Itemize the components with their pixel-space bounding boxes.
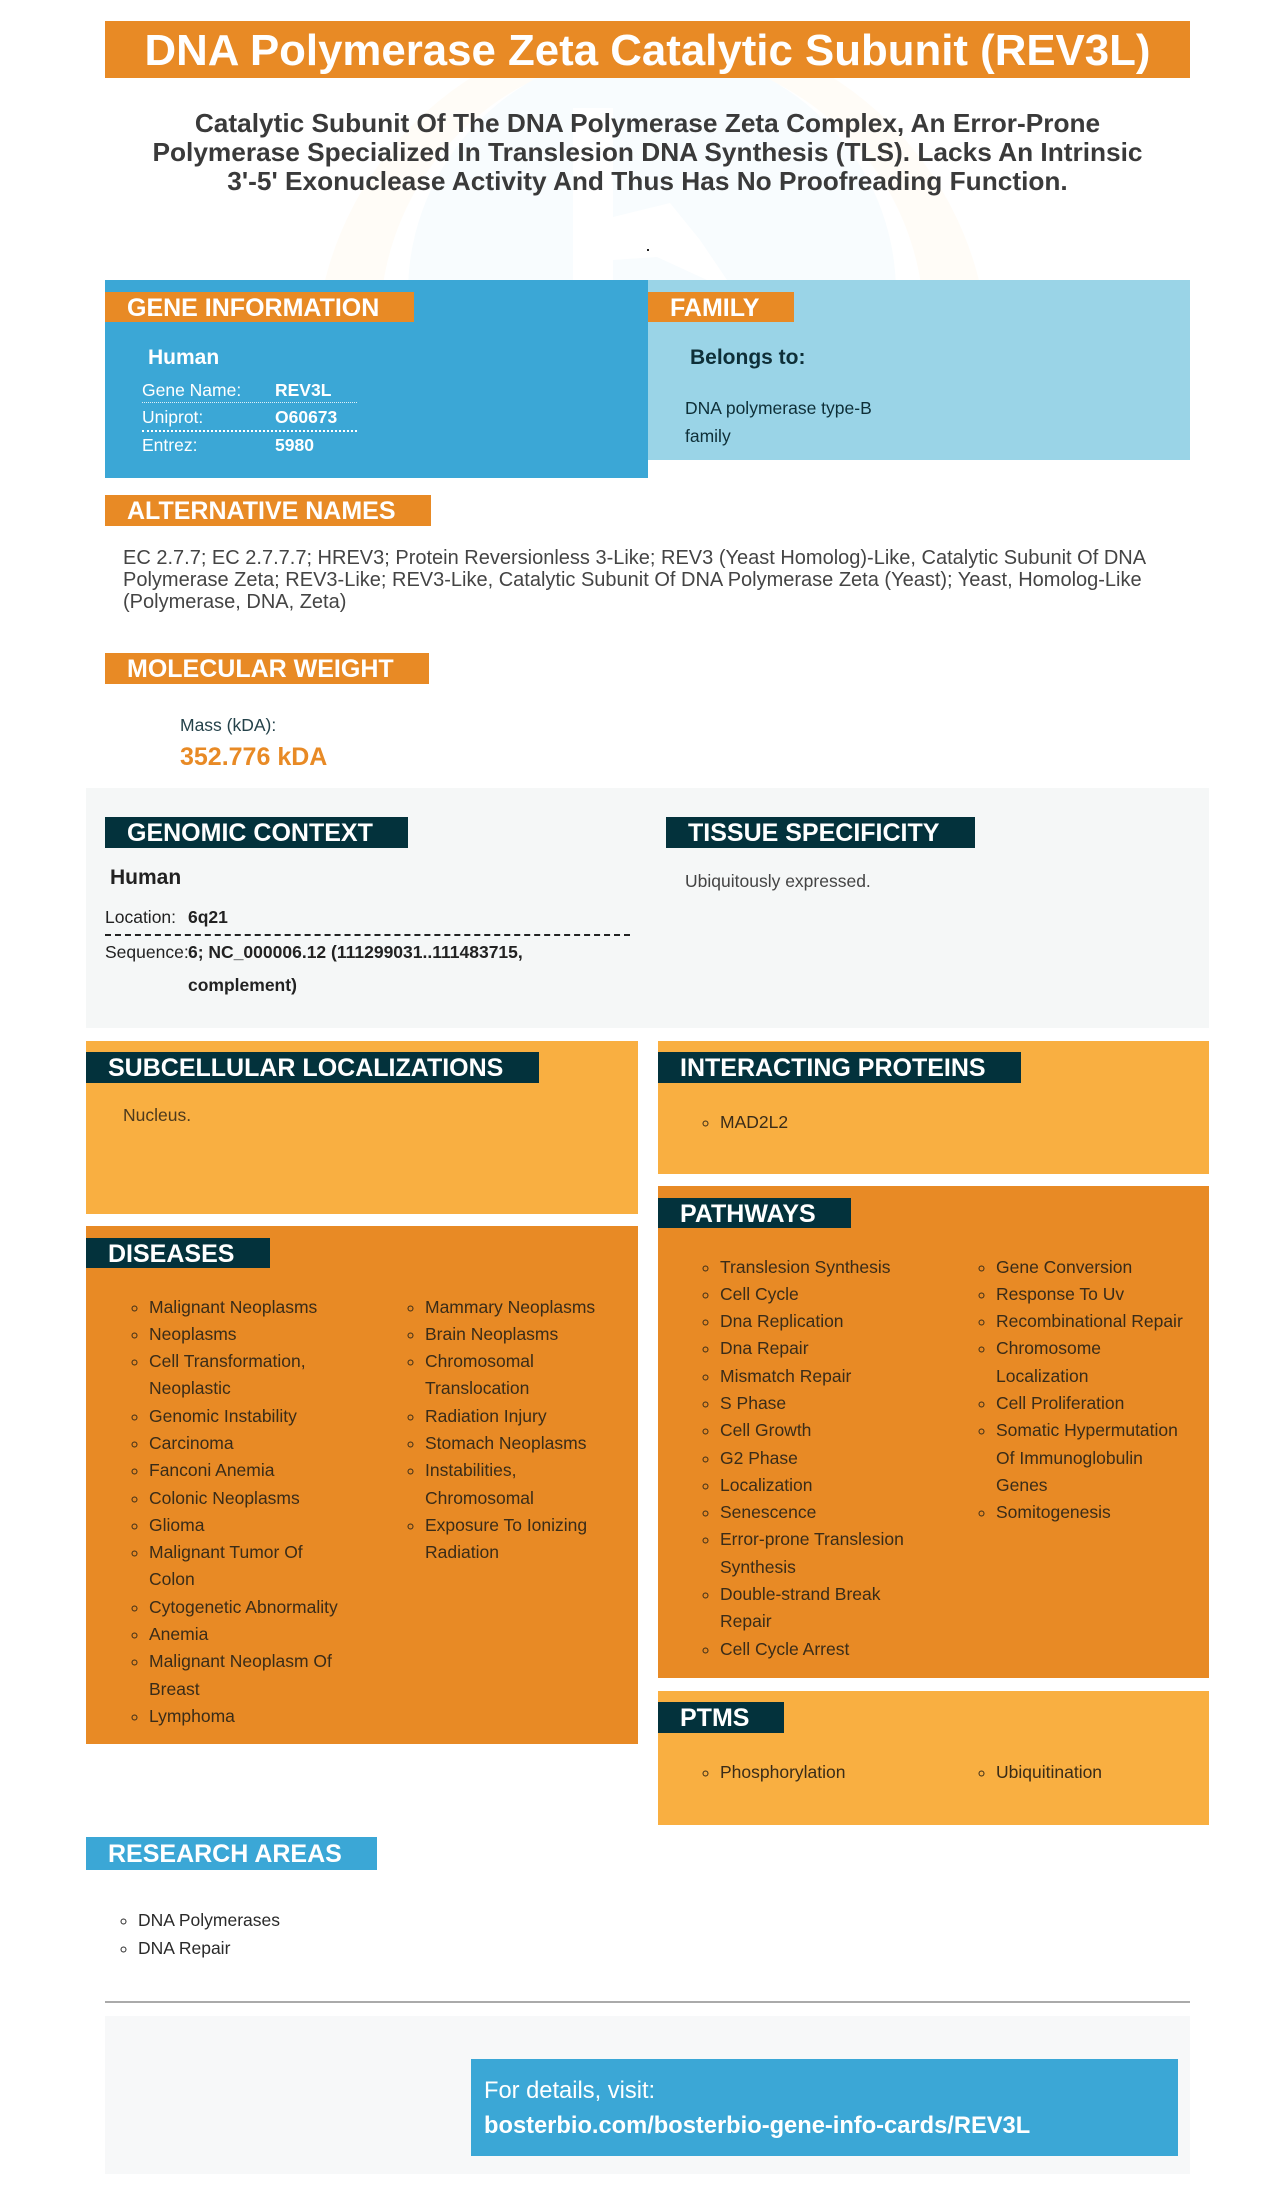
- pathway list column 2: Localization: [996, 1366, 1088, 1386]
- disease list column 1: Cell Transformation,: [149, 1351, 306, 1371]
- heading: pathways: PATHWAYS: [680, 1200, 816, 1228]
- subtitle description: 3'-5' Exonuclease Activity And Thus Has No Proofreading Function.: [227, 166, 1068, 196]
- subtitle description: Catalytic Subunit Of The DNA Polymerase Zeta Complex, An Error-Prone: [195, 108, 1100, 138]
- pathway list column 1: Senescence: [720, 1502, 816, 1522]
- localization text: Nucleus.: [123, 1105, 191, 1125]
- subtitle description: Polymerase Specialized In Translesion DNA Synthesis (TLS). Lacks An Intrinsic: [152, 136, 1143, 166]
- disease list column 1: Neoplasms: [149, 1324, 237, 1344]
- species label: Human: [148, 346, 219, 369]
- panel: genomic context and tissue specificity: [86, 788, 1209, 1028]
- panel: footer: [105, 2016, 1190, 2174]
- heading: family: [648, 292, 794, 322]
- gene detail table: [142, 380, 357, 455]
- disease list column 2: Chromosomal: [425, 1488, 534, 1508]
- disease list column 1: Carcinoma: [149, 1433, 234, 1453]
- panel: pathways: [658, 1186, 1209, 1678]
- panel: subcellular localizations: [86, 1041, 638, 1214]
- disease list column 2: Radiation Injury: [425, 1406, 547, 1426]
- panel: ptms: [658, 1691, 1209, 1825]
- panel: diseases: [86, 1226, 638, 1744]
- sequence value: 6; NC_000006.12 (111299031..111483715,: [188, 942, 523, 962]
- alternative names text: [123, 547, 1146, 613]
- gene detail table: 5980: [275, 435, 314, 455]
- research areas list: DNA Polymerases: [138, 1910, 280, 1930]
- pathway list column 2: Response To Uv: [996, 1284, 1124, 1304]
- subtitle description: [152, 108, 1143, 196]
- ptm list column 2: Ubiquitination: [996, 1762, 1102, 1782]
- pathway list column 2: Somitogenesis: [996, 1502, 1111, 1522]
- location row: Location:: [105, 907, 176, 927]
- heading: interacting proteins: INTERACTING PROTEINS: [680, 1054, 986, 1082]
- disease list column 1: Anemia: [149, 1624, 208, 1644]
- heading: gene information: GENE INFORMATION: [127, 294, 379, 322]
- disease list column 2: [408, 1296, 595, 1562]
- research areas list: [120, 1910, 280, 1958]
- sequence value: [188, 942, 523, 994]
- location value: 6q21: [188, 907, 228, 927]
- mass label: Mass (kDA):: [180, 715, 276, 735]
- pathway list column 1: Cell Cycle Arrest: [720, 1639, 849, 1659]
- heading: subcellular localizations: SUBCELLULAR LOCALIZATIONS: [108, 1054, 503, 1082]
- pathway list column 1: G2 Phase: [720, 1448, 798, 1468]
- pathway list column 2: Recombinational Repair: [996, 1311, 1183, 1331]
- heading: ptms: [658, 1702, 784, 1733]
- center dot: [647, 249, 649, 251]
- disease list column 2: Brain Neoplasms: [425, 1324, 558, 1344]
- gene detail table: REV3L: [275, 380, 331, 400]
- disease list column 2: Stomach Neoplasms: [425, 1433, 586, 1453]
- pathway list column 2: [978, 1256, 1183, 1522]
- disease list column 1: Malignant Neoplasms: [149, 1296, 317, 1316]
- disease list column 1: Cytogenetic Abnormality: [149, 1597, 338, 1617]
- disease list column 1: Colonic Neoplasms: [149, 1488, 300, 1508]
- panel: family: [648, 280, 1190, 460]
- belongs to label: Belongs to:: [690, 346, 806, 369]
- disease list column 2: Mammary Neoplasms: [425, 1296, 595, 1316]
- disease list column 1: Glioma: [149, 1515, 204, 1535]
- family text: [685, 398, 872, 446]
- disease list column 2: Exposure To Ionizing: [425, 1515, 587, 1535]
- heading: family: FAMILY: [670, 294, 759, 322]
- gene detail table: Gene Name:: [142, 380, 241, 400]
- dashed divider: [105, 934, 630, 936]
- disease list column 2: Radiation: [425, 1542, 499, 1562]
- species label: Human: [110, 866, 181, 889]
- heading: molecular weight: MOLECULAR WEIGHT: [127, 655, 394, 683]
- tissue specificity text: Ubiquitously expressed.: [685, 871, 871, 891]
- disease list column 1: Lymphoma: [149, 1706, 235, 1726]
- heading: alternative names: ALTERNATIVE NAMES: [127, 497, 396, 525]
- sequence value: complement): [188, 974, 297, 994]
- pathway list column 1: Localization: [720, 1475, 812, 1495]
- pathway list column 1: Translesion Synthesis: [720, 1256, 891, 1276]
- heading: tissue specificity: TISSUE SPECIFICITY: [688, 819, 939, 847]
- gene detail table: Uniprot:: [142, 407, 203, 427]
- pathway list column 1: Double-strand Break: [720, 1584, 880, 1604]
- heading: diseases: DISEASES: [108, 1240, 234, 1268]
- pathway list column 2: Somatic Hypermutation: [996, 1420, 1178, 1440]
- gene detail table: O60673: [275, 407, 337, 427]
- gene detail table: Entrez:: [142, 435, 197, 455]
- heading: research areas: RESEARCH AREAS: [108, 1840, 342, 1868]
- pathway list column 1: Synthesis: [720, 1557, 796, 1577]
- pathway list column 2: Genes: [996, 1475, 1048, 1495]
- disease list column 1: Colon: [149, 1569, 195, 1589]
- heading: ptms: PTMS: [680, 1704, 749, 1732]
- pathway list column 1: [702, 1256, 904, 1659]
- alternative names text: (Polymerase, DNA, Zeta): [123, 591, 346, 613]
- pathway list column 2: Gene Conversion: [996, 1256, 1132, 1276]
- footer divider: [105, 2001, 1190, 2003]
- pathway list column 1: Dna Repair: [720, 1338, 809, 1358]
- pathway list column 1: Mismatch Repair: [720, 1366, 851, 1386]
- research areas list: DNA Repair: [138, 1938, 230, 1958]
- pathway list column 2: Cell Proliferation: [996, 1393, 1124, 1413]
- disease list column 2: Translocation: [425, 1378, 529, 1398]
- pathway list column 1: Dna Replication: [720, 1311, 844, 1331]
- pathway list column 1: Cell Growth: [720, 1420, 811, 1440]
- callout: details link: [471, 2059, 1178, 2156]
- heading: genomic context: GENOMIC CONTEXT: [127, 819, 373, 847]
- pathway list column 2: Of Immunoglobulin: [996, 1448, 1143, 1468]
- panel: gene information: [105, 280, 648, 478]
- pathway list column 1: Repair: [720, 1611, 772, 1631]
- pathway list column 1: S Phase: [720, 1393, 786, 1413]
- panel: interacting proteins: [658, 1041, 1209, 1174]
- sequence label: Sequence:: [105, 942, 189, 962]
- mass value: 352.776 kDA: [180, 743, 327, 771]
- disease list column 1: Breast: [149, 1679, 200, 1699]
- disease list column 1: Fanconi Anemia: [149, 1460, 274, 1480]
- alternative names text: Polymerase Zeta; REV3-Like; REV3-Like, Catalytic Subunit Of DNA Polymerase Zeta (Yeast); Yeast, Homolog-Like: [123, 569, 1142, 591]
- disease list column 2: Chromosomal: [425, 1351, 534, 1371]
- alternative names text: EC 2.7.7; EC 2.7.7.7; HREV3; Protein Reversionless 3-Like; REV3 (Yeast Homolog)-Like, Catalytic Subunit Of DNA: [123, 547, 1146, 569]
- pathway list column 1: Error-prone Translesion: [720, 1529, 904, 1549]
- protein list: MAD2L2: [720, 1112, 788, 1132]
- family text: DNA polymerase type-B: [685, 398, 872, 418]
- disease list column 1: Neoplastic: [149, 1378, 231, 1398]
- title banner: DNA Polymerase Zeta Catalytic Subunit (REV3L): [145, 26, 1150, 75]
- callout url: bosterbio.com/bosterbio-gene-info-cards/REV3L: [484, 2113, 1030, 2139]
- heading: pathways: [658, 1198, 851, 1228]
- disease list column 2: Instabilities,: [425, 1460, 516, 1480]
- heading: research areas: [86, 1837, 377, 1870]
- background watermark: [0, 0, 1288, 280]
- disease list column 1: [132, 1296, 338, 1726]
- pathway list column 1: Cell Cycle: [720, 1284, 799, 1304]
- heading: diseases: [86, 1238, 270, 1268]
- ptm list column 1: Phosphorylation: [720, 1762, 846, 1782]
- pathway list column 2: Chromosome: [996, 1338, 1101, 1358]
- callout label: For details, visit:: [484, 2078, 655, 2104]
- disease list column 1: Genomic Instability: [149, 1406, 297, 1426]
- disease list column 1: Malignant Neoplasm Of: [149, 1651, 332, 1671]
- disease list column 1: Malignant Tumor Of: [149, 1542, 303, 1562]
- family text: family: [685, 426, 731, 446]
